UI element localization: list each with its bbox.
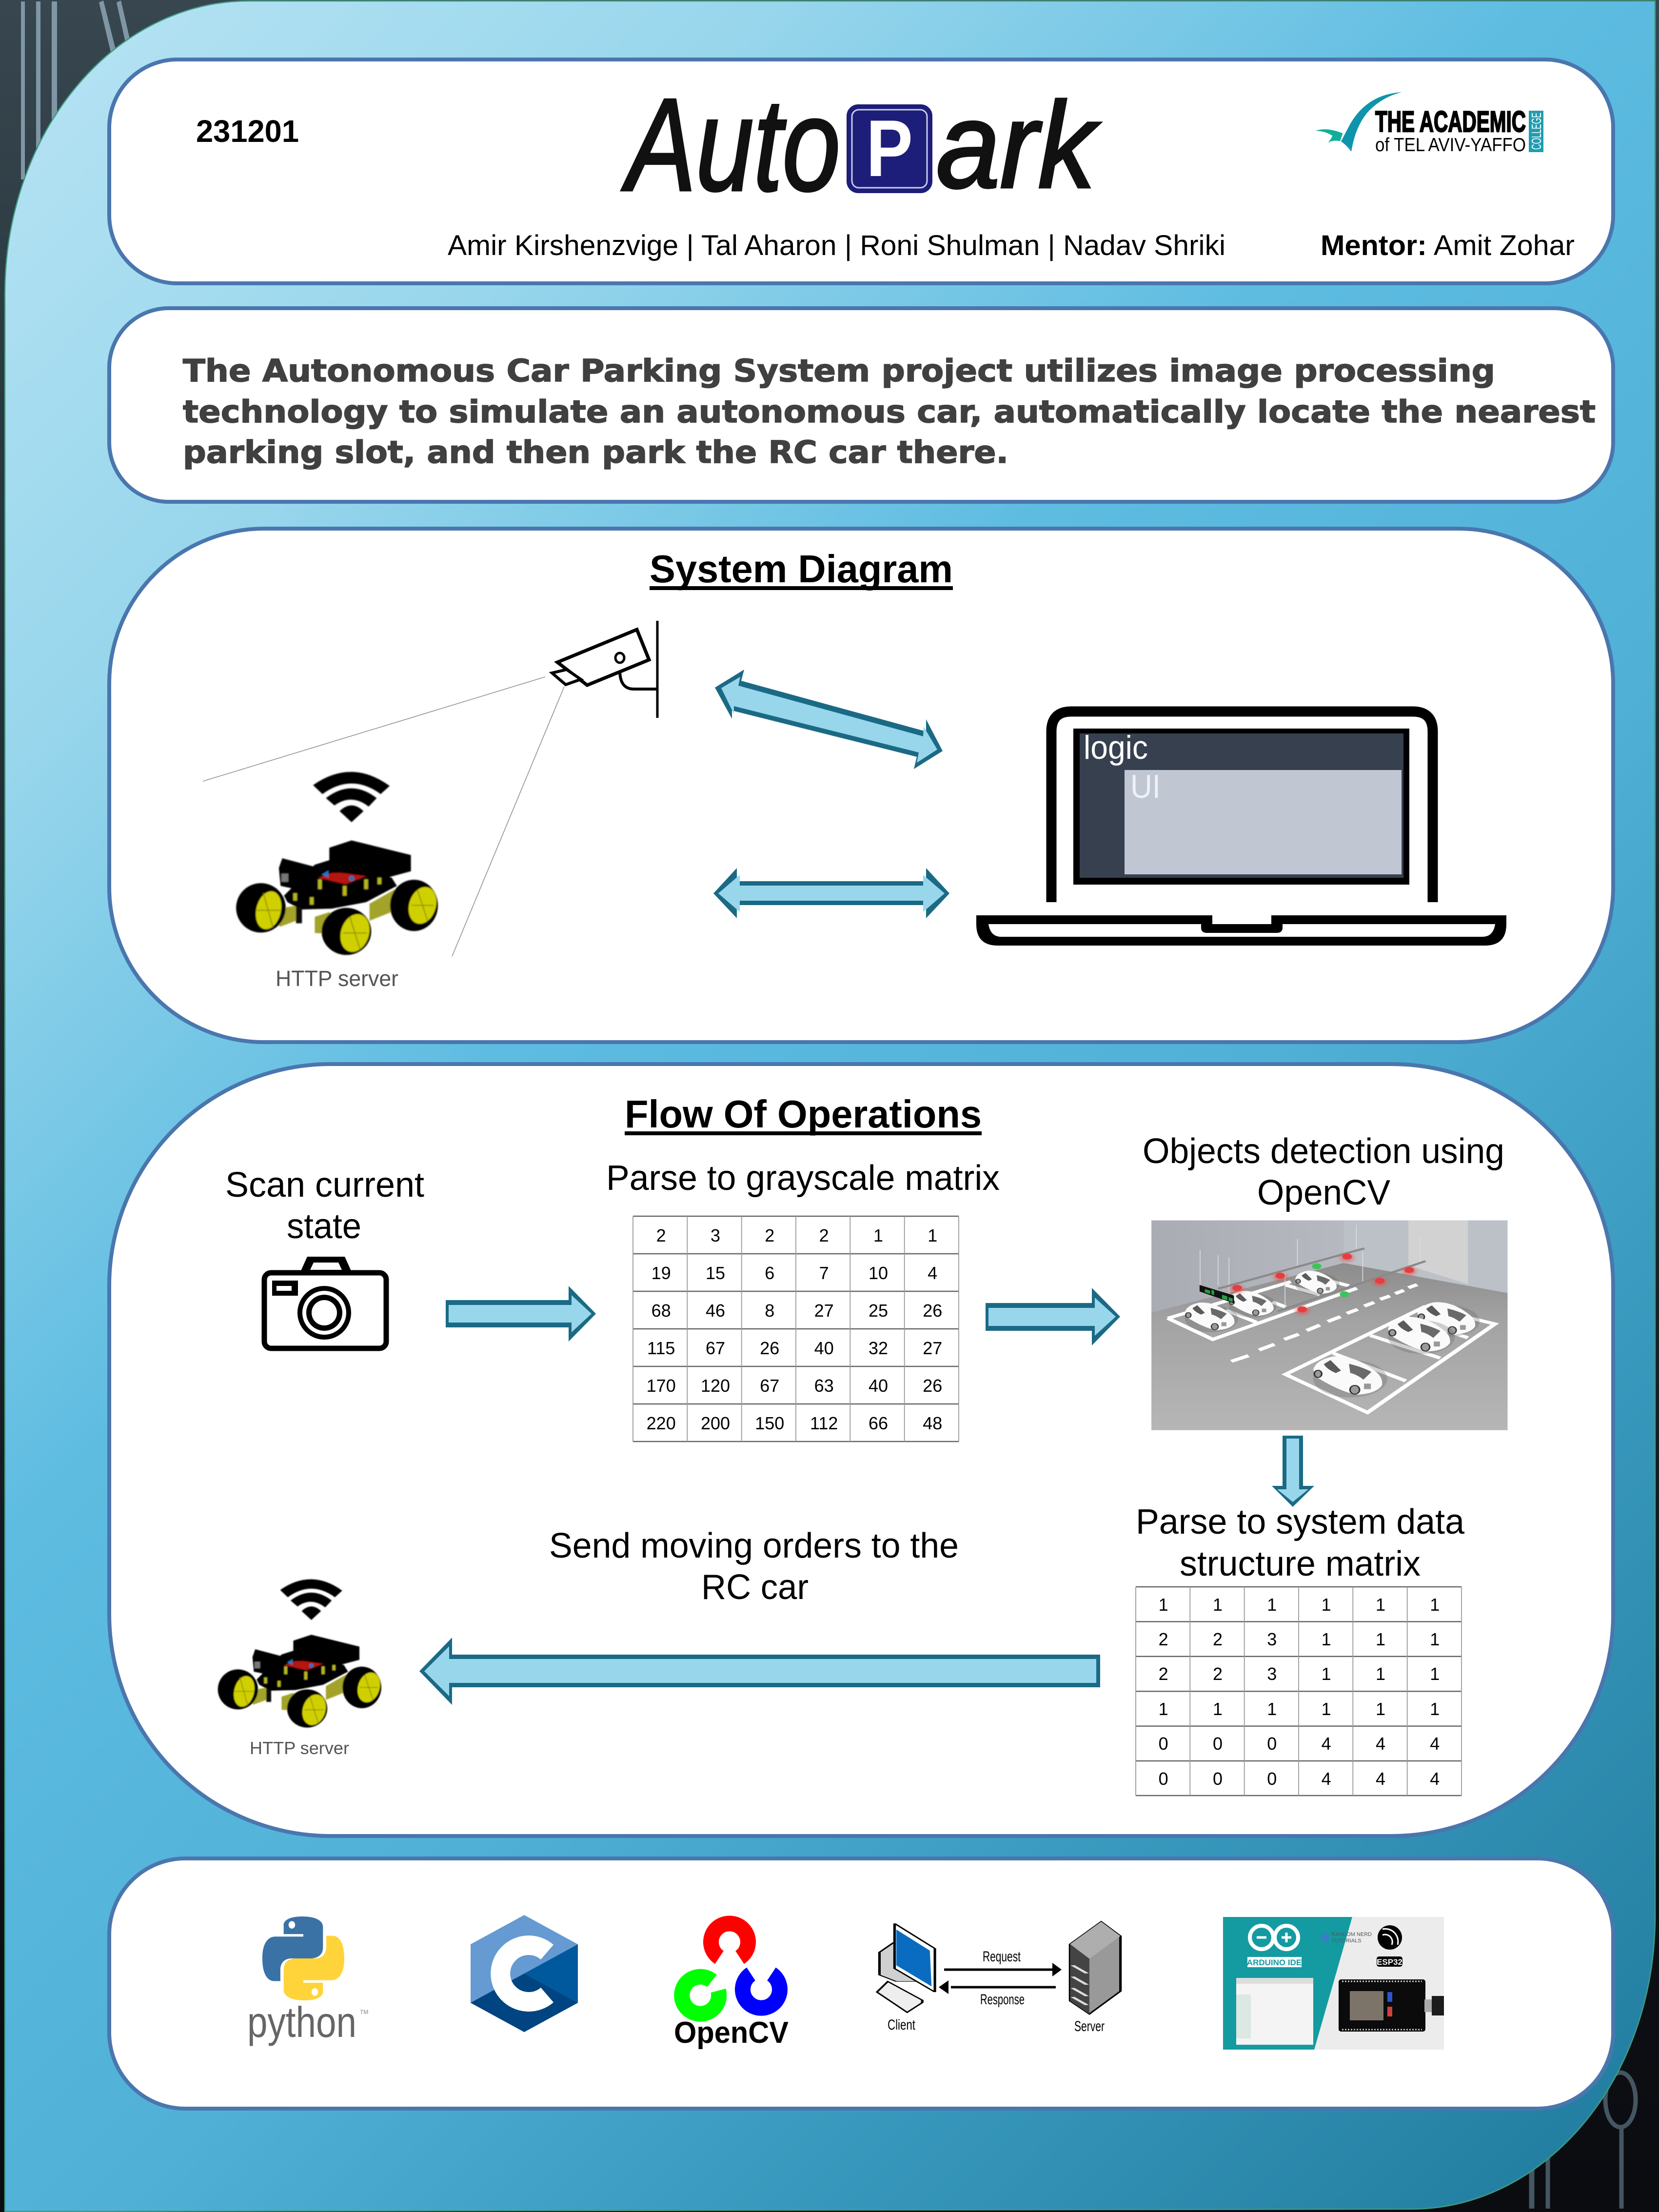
mentor: Mentor: xyxy=(1321,230,1427,261)
table: system data structure matrix: 2 xyxy=(1213,1629,1223,1649)
table: system data structure matrix xyxy=(1136,1587,1462,1796)
table: grayscale matrix: 2 xyxy=(765,1225,774,1245)
step: scan current state xyxy=(225,1165,424,1246)
logo: OpenCV: OpenCV xyxy=(674,2016,789,2050)
arrow: detection to data structure xyxy=(1272,1436,1314,1507)
step: parse to grayscale matrix: Parse to grayscale matrix xyxy=(606,1159,1000,1198)
table: grayscale matrix: 120 xyxy=(701,1376,730,1396)
step: parse to system data: Parse to system data xyxy=(1136,1502,1465,1541)
table: grayscale matrix: 40 xyxy=(814,1338,834,1358)
panel: header xyxy=(109,59,1613,285)
table: grayscale matrix: 63 xyxy=(814,1376,834,1396)
image: parking lot xyxy=(1151,1221,1507,1430)
step: scan current state: state xyxy=(287,1207,361,1246)
table: grayscale matrix: 66 xyxy=(869,1413,888,1433)
table: grayscale matrix: 48 xyxy=(923,1413,942,1433)
diagram: client server: Client xyxy=(888,2017,915,2033)
table: grayscale matrix: 220 xyxy=(647,1413,676,1433)
table: system data structure matrix: 1 xyxy=(1213,1699,1223,1719)
logo: OpenCV xyxy=(674,1923,789,2050)
table: system data structure matrix: 1 xyxy=(1213,1595,1223,1615)
table: grayscale matrix: 27 xyxy=(923,1338,942,1358)
panel: technologies xyxy=(109,1858,1613,2111)
diagram: client server: Request xyxy=(983,1949,1021,1965)
table: grayscale matrix: 26 xyxy=(923,1301,942,1321)
table: system data structure matrix: 0 xyxy=(1213,1769,1223,1789)
step: objects detection: OpenCV xyxy=(1257,1173,1390,1212)
arrow: camera to laptop xyxy=(715,670,943,769)
step: send moving orders: RC car xyxy=(701,1568,809,1607)
heading: system diagram: System Diagram xyxy=(650,547,953,591)
table: system data structure matrix: 1 xyxy=(1430,1699,1440,1719)
table: system data structure matrix: 1 xyxy=(1430,1664,1440,1684)
table: system data structure matrix: 0 xyxy=(1267,1734,1277,1754)
table: system data structure matrix: 0 xyxy=(1159,1734,1168,1754)
table: grayscale matrix: 40 xyxy=(869,1376,888,1396)
table: system data structure matrix: 4 xyxy=(1322,1734,1331,1754)
car label: HTTP server xyxy=(276,966,398,991)
logo: python: TM xyxy=(360,2009,368,2015)
step: send moving orders xyxy=(549,1526,959,1607)
table: system data structure matrix: 4 xyxy=(1322,1769,1331,1789)
summary text: parking slot, and then park the RC car there. xyxy=(183,434,1008,470)
table: grayscale matrix: 7 xyxy=(819,1263,829,1283)
logo: python: python xyxy=(247,1998,356,2046)
diagram: client server: Response xyxy=(980,1992,1025,2008)
step: parse to system data: structure matrix xyxy=(1180,1544,1421,1583)
image: Arduino IDE and ESP32: TUTORIALS xyxy=(1331,1938,1362,1944)
table: system data structure matrix: 1 xyxy=(1267,1595,1277,1615)
image: Arduino IDE and ESP32: ARDUINO IDE xyxy=(1247,1958,1302,1967)
table: system data structure matrix: 2 xyxy=(1213,1664,1223,1684)
team members: Amir Kirshenzvige | Tal Aharon | Roni Shulman | Nadav Shriki xyxy=(448,230,1225,261)
table: system data structure matrix: 1 xyxy=(1267,1699,1277,1719)
table: grayscale matrix xyxy=(633,1216,959,1442)
heading: flow of operations: Flow Of Operations xyxy=(625,1092,982,1136)
arrow: matrix to detection xyxy=(986,1288,1120,1345)
step: parse to system data xyxy=(1136,1502,1465,1583)
college logo: COLLEGE xyxy=(1529,113,1544,150)
icon: laptop: UI xyxy=(1130,768,1161,805)
title: AutoPark logo: P xyxy=(866,103,913,193)
table: grayscale matrix: 32 xyxy=(869,1338,888,1358)
arrow: scan to matrix xyxy=(446,1286,596,1342)
panel: system diagram xyxy=(109,529,1613,1044)
decorative bottom-right lines xyxy=(1532,2073,1636,2209)
icon: RC car with wifi xyxy=(236,772,440,955)
table: system data structure matrix: 4 xyxy=(1430,1734,1440,1754)
title: AutoPark logo: Auto xyxy=(620,72,840,218)
table: grayscale matrix: 2 xyxy=(819,1225,829,1245)
table: grayscale matrix: 115 xyxy=(647,1338,675,1358)
image: Arduino IDE and ESP32: ESP32 xyxy=(1377,1957,1402,1967)
table: grayscale matrix: 15 xyxy=(706,1263,725,1283)
college logo xyxy=(1315,92,1544,156)
table: system data structure matrix: 1 xyxy=(1376,1595,1385,1615)
college logo: THE ACADEMIC xyxy=(1375,105,1526,138)
arrow: data structure to car xyxy=(419,1638,1100,1705)
table: system data structure matrix: 0 xyxy=(1213,1734,1223,1754)
table: system data structure matrix: 1 xyxy=(1322,1595,1331,1615)
table: system data structure matrix: 0 xyxy=(1267,1769,1277,1789)
project number: 231201 xyxy=(196,114,299,149)
table: grayscale matrix: 19 xyxy=(652,1263,671,1283)
table: grayscale matrix: 150 xyxy=(755,1413,784,1433)
title: AutoPark logo xyxy=(620,72,1100,218)
table: grayscale matrix: 6 xyxy=(765,1263,774,1283)
summary text: The Autonomous Car Parking System project utilizes image processing xyxy=(183,353,1495,389)
table: grayscale matrix: 67 xyxy=(760,1376,779,1396)
logo: python xyxy=(247,1916,368,2046)
table: grayscale matrix: 1 xyxy=(873,1225,883,1245)
table: system data structure matrix: 2 xyxy=(1159,1629,1168,1649)
icon: camera xyxy=(264,1257,386,1348)
summary text: technology to simulate an autonomous car, automatically locate the nearest xyxy=(183,394,1596,430)
table: grayscale matrix: 112 xyxy=(810,1413,838,1433)
image: Arduino IDE and ESP32 xyxy=(1223,1917,1444,2050)
table: grayscale matrix: 26 xyxy=(923,1376,942,1396)
table: system data structure matrix: 1 xyxy=(1159,1699,1168,1719)
image: Arduino IDE and ESP32: RANDOM NERD xyxy=(1331,1932,1372,1937)
icon: security camera with view cone xyxy=(203,621,657,956)
step: objects detection xyxy=(1143,1132,1504,1212)
diagram: client server xyxy=(877,1922,1121,2034)
table: system data structure matrix: 1 xyxy=(1430,1629,1440,1649)
college logo: of TEL AVIV-YAFFO xyxy=(1375,135,1526,156)
table: grayscale matrix: 68 xyxy=(652,1301,671,1321)
table: grayscale matrix: 46 xyxy=(706,1301,725,1321)
step: objects detection: Objects detection using xyxy=(1143,1132,1504,1171)
table: grayscale matrix: 170 xyxy=(647,1376,676,1396)
table: system data structure matrix: 1 xyxy=(1376,1664,1385,1684)
step: send moving orders: Send moving orders to the xyxy=(549,1526,959,1565)
summary text xyxy=(183,353,1596,470)
panel: project summary xyxy=(109,308,1613,504)
table: grayscale matrix: 200 xyxy=(701,1413,730,1433)
step: scan current state: Scan current xyxy=(225,1165,424,1205)
table: system data structure matrix: 1 xyxy=(1159,1595,1168,1615)
title: AutoPark logo: ark xyxy=(936,77,1100,213)
mentor: Amit Zohar xyxy=(1434,230,1575,261)
table: grayscale matrix: 8 xyxy=(765,1301,774,1321)
table: system data structure matrix: 1 xyxy=(1322,1664,1331,1684)
arrow: car to laptop xyxy=(713,868,949,918)
table: grayscale matrix: 67 xyxy=(706,1338,725,1358)
table: system data structure matrix: 1 xyxy=(1430,1595,1440,1615)
logo: C language xyxy=(471,1915,578,2032)
icon: RC car with wifi, second xyxy=(218,1580,383,1728)
panel: flow of operations xyxy=(109,1064,1613,1838)
table: system data structure matrix: 1 xyxy=(1322,1699,1331,1719)
table: system data structure matrix: 1 xyxy=(1322,1629,1331,1649)
table: grayscale matrix: 3 xyxy=(711,1225,720,1245)
table: grayscale matrix: 26 xyxy=(760,1338,779,1358)
mentor xyxy=(1321,230,1575,261)
icon: laptop: logic xyxy=(1084,729,1148,766)
table: system data structure matrix: 3 xyxy=(1267,1629,1277,1649)
icon: laptop xyxy=(976,711,1506,946)
table: system data structure matrix: 2 xyxy=(1159,1664,1168,1684)
table: grayscale matrix: 2 xyxy=(656,1225,666,1245)
table: system data structure matrix: 4 xyxy=(1430,1769,1440,1789)
table: system data structure matrix: 1 xyxy=(1376,1629,1385,1649)
second car label: HTTP server xyxy=(250,1738,349,1758)
table: grayscale matrix: 27 xyxy=(814,1301,834,1321)
table: system data structure matrix: 4 xyxy=(1376,1769,1385,1789)
table: system data structure matrix: 3 xyxy=(1267,1664,1277,1684)
table: system data structure matrix: 0 xyxy=(1159,1769,1168,1789)
table: system data structure matrix: 4 xyxy=(1376,1734,1385,1754)
table: grayscale matrix: 1 xyxy=(928,1225,937,1245)
table: grayscale matrix: 25 xyxy=(869,1301,888,1321)
decorative top-left lines xyxy=(21,0,131,179)
table: grayscale matrix: 10 xyxy=(869,1263,888,1283)
table: grayscale matrix: 4 xyxy=(928,1263,937,1283)
table: system data structure matrix: 1 xyxy=(1376,1699,1385,1719)
diagram: client server: Server xyxy=(1074,2018,1105,2034)
